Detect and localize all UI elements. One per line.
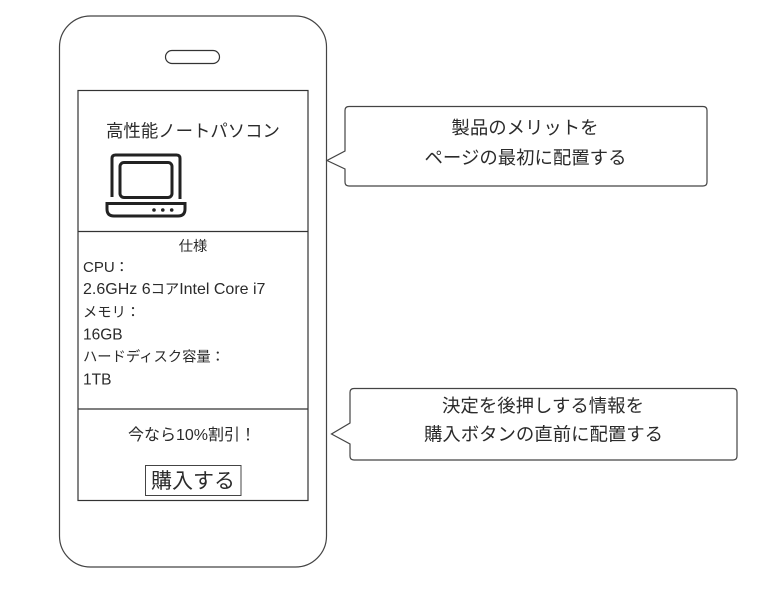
purchase button (146, 466, 241, 496)
section: purchase (78, 409, 308, 496)
callout: purchase decision: 購入ボタンの直前に配置する (424, 424, 663, 444)
icon: laptop (107, 155, 185, 216)
section: specifications (78, 232, 308, 388)
callout: product merit: 製品のメリットを (451, 117, 599, 138)
specification list: CPU： (83, 259, 129, 276)
specification list: 2.6GHz 6コアIntel Core i7 (83, 281, 266, 298)
divider above purchase section (78, 408, 308, 410)
callout: product merit (327, 106, 707, 186)
specification list (83, 259, 266, 388)
phone speaker (166, 50, 220, 64)
phone body (60, 16, 326, 567)
specification list: 1TB (83, 372, 111, 388)
callout: purchase decision: 決定を後押しする情報を (442, 395, 644, 416)
panel: phone screen (78, 90, 308, 500)
callout: purchase decision (332, 388, 737, 460)
callout: product merit: ページの最初に配置する (425, 147, 626, 168)
screen frame (78, 90, 308, 500)
discount text: 今なら10%割引！ (128, 426, 256, 444)
specification list: メモリ： (83, 305, 140, 321)
specifications heading: 仕様 (179, 238, 207, 255)
specification list: ハードディスク容量： (83, 348, 225, 366)
divider above specifications (78, 230, 308, 232)
purchase button: 購入する (151, 470, 235, 493)
panel: smartphone (60, 16, 326, 567)
product title: 高性能ノートパソコン (106, 121, 280, 141)
section: product hero (106, 121, 280, 216)
specification list: 16GB (83, 326, 123, 344)
